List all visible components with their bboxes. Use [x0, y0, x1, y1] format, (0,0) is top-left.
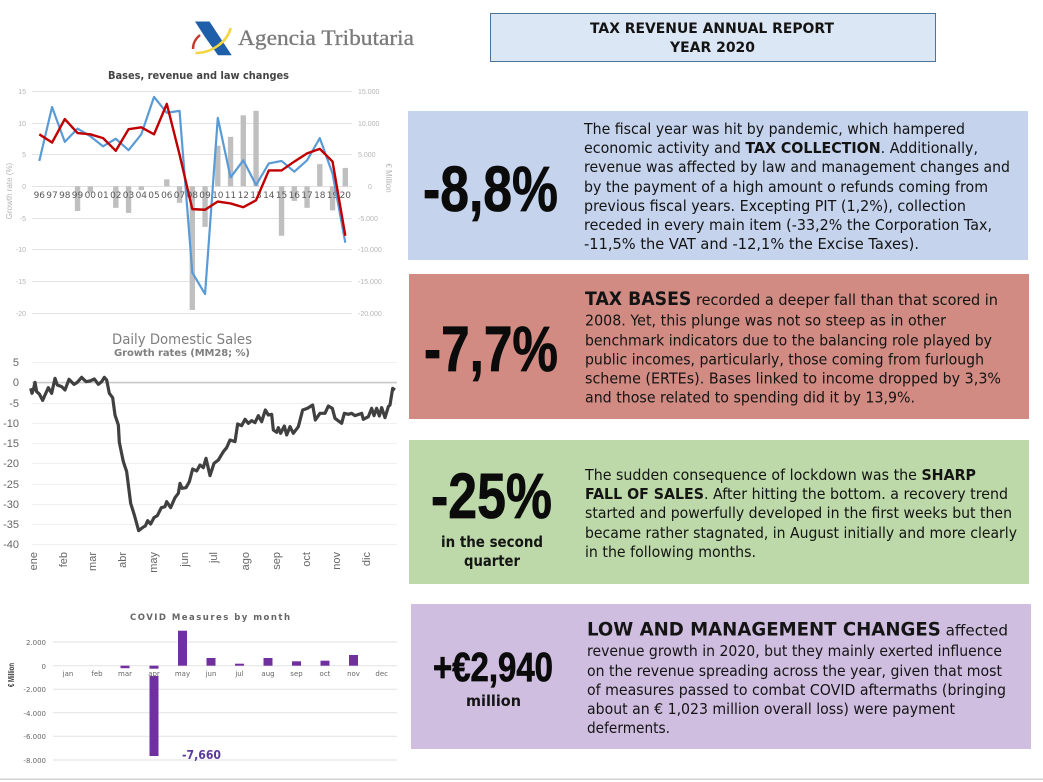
right axis labels: -15.000	[358, 279, 382, 286]
key figure caption	[441, 533, 543, 570]
month labels: may	[148, 552, 160, 573]
panel text: revenue was affected by law and management changes and	[584, 158, 1010, 176]
year labels: 11	[225, 191, 236, 201]
month labels	[28, 552, 373, 573]
year labels: 18	[314, 191, 326, 201]
month labels: dec	[375, 670, 388, 678]
year labels: 12	[238, 191, 249, 201]
panel text	[587, 620, 1008, 737]
y axis labels: -30	[3, 499, 19, 511]
panel: tax bases	[409, 274, 1029, 419]
month labels: sep	[271, 552, 283, 570]
logo: Agencia Tributaria	[193, 22, 414, 55]
panel text: The fiscal year was hit by pandemic, which hampered	[583, 120, 965, 138]
panel text: about an € 1,023 million overall loss) were payment	[587, 700, 955, 718]
left axis labels: -15	[16, 279, 26, 286]
axis title: million euro: € Million	[7, 663, 16, 687]
panel text: FALL OF SALES. After hitting the bottom. a recovery trend	[585, 485, 1008, 503]
month labels: mar	[118, 670, 132, 678]
panel text: on the revenue spreading across the year, given that most	[587, 662, 1002, 680]
panel text: of measures passed to combat COVID aftermaths (bringing	[587, 681, 1006, 699]
month labels: jan	[62, 670, 73, 678]
right axis labels: 5.000	[358, 152, 376, 159]
right axis labels: -10.000	[358, 247, 382, 254]
month labels: nov	[331, 552, 343, 570]
month labels: ene	[28, 552, 40, 570]
panel text: scheme (ERTEs). Bases linked to income dropped by 3,3%	[585, 370, 1001, 388]
month labels: ago	[240, 552, 252, 570]
left axis labels: -20	[16, 311, 26, 318]
y axis labels: 0	[13, 377, 19, 389]
y axis labels: -20	[3, 458, 19, 470]
chart title: Bases, revenue and law changes	[108, 69, 289, 82]
year labels: 17	[301, 191, 313, 201]
y axis labels: -5	[9, 398, 19, 410]
month labels: jul	[208, 552, 220, 564]
month labels: feb	[91, 670, 103, 678]
panel text: deferments.	[587, 719, 670, 737]
chart: bases, revenue and law changes	[5, 69, 393, 318]
panel text: The sudden consequence of lockdown was the SHARP	[584, 466, 976, 484]
left axis labels: 10	[18, 121, 26, 128]
month labels: abr	[117, 552, 129, 568]
y axis labels: -10	[3, 418, 19, 430]
chart: COVID measures by month	[7, 613, 397, 765]
year labels	[34, 191, 351, 201]
year labels: 20	[340, 191, 351, 201]
panel text: -11,5% the VAT and -12,1% the Excise Taxes).	[584, 235, 919, 253]
title box: TAX REVENUE ANNUAL REPORT	[590, 21, 834, 37]
left axis labels	[16, 89, 26, 318]
y axis labels	[3, 357, 19, 551]
month labels: sep	[290, 670, 303, 678]
year labels: 98	[59, 191, 71, 201]
chart title: COVID Measures by month	[130, 613, 290, 623]
right axis labels: -5.000	[358, 216, 378, 223]
left axis labels: 15	[18, 89, 26, 96]
panel text	[584, 466, 1017, 561]
panel text	[585, 289, 1001, 406]
left axis labels: -10	[16, 247, 26, 254]
axis title: growth rate: Growth rate (%)	[5, 162, 14, 219]
year labels: 16	[289, 191, 300, 201]
year labels: 09	[199, 191, 211, 201]
month labels: apr	[148, 670, 160, 678]
y axis labels: -6.000	[23, 733, 46, 741]
y axis labels: -8.000	[23, 757, 46, 765]
month labels: feb	[58, 552, 70, 567]
panel text: TAX BASES recorded a deeper fall than that scored in	[585, 289, 998, 310]
key figure: +€2,940	[433, 644, 553, 690]
y axis labels: -40	[3, 539, 19, 551]
panel text: receded in every main item (-33,2% the Corporation Tax,	[584, 216, 992, 234]
panel text: LOW AND MANAGEMENT CHANGES affected	[587, 620, 1008, 640]
year labels: 00	[85, 191, 96, 201]
title box: YEAR 2020	[669, 40, 755, 56]
panel text	[583, 120, 1010, 253]
logo: Agencia Tributaria: Agencia Tributaria	[238, 25, 414, 50]
right axis labels: -20.000	[358, 311, 382, 318]
panel text: benchmark indicators due to the balancing role played by	[585, 332, 992, 350]
y axis labels: -15	[3, 438, 19, 450]
right axis labels: 15.000	[358, 89, 380, 96]
month labels: mar	[87, 552, 99, 571]
left axis labels: 5	[22, 152, 26, 159]
key figure: -7,7%	[424, 313, 558, 385]
year labels: 13	[250, 191, 262, 201]
panel text: previous fiscal years. Excepting PIT (1,2%), collection	[584, 197, 966, 215]
year labels: 97	[46, 191, 58, 201]
right axis labels	[358, 89, 382, 318]
year labels: 05	[148, 191, 160, 201]
y axis labels: 0	[42, 663, 46, 671]
month labels: jun	[205, 670, 216, 678]
sales line	[31, 377, 395, 531]
panel text: revenue growth in 2020, but they mainly exerted influence	[587, 642, 1002, 660]
y axis labels: 5	[13, 357, 19, 369]
year labels: 04	[136, 191, 147, 201]
panel text: and those related to spending did it by 13,9%.	[585, 388, 915, 406]
key figure caption: in the second	[441, 533, 543, 551]
right axis labels: 0	[368, 184, 372, 191]
panel text: economic activity and TAX COLLECTION. Additionally,	[584, 139, 978, 157]
month labels: may	[175, 670, 190, 678]
blue line: revenue	[39, 97, 345, 294]
panel text: by the payment of a high amount o refunds coming from	[584, 178, 988, 196]
chart: daily domestic sales	[3, 332, 397, 573]
panel text: started and powerfully developed in the first weeks but then	[585, 504, 1012, 522]
month labels: jun	[179, 552, 191, 568]
grey bars: law changes	[75, 111, 348, 310]
month labels: nov	[347, 670, 360, 678]
panel: sales	[409, 440, 1029, 584]
year labels: 10	[212, 191, 224, 201]
right axis labels: 10.000	[358, 121, 380, 128]
panel: total revenue	[408, 111, 1028, 260]
y axis labels: -35	[3, 519, 19, 531]
year labels: 07	[174, 191, 185, 201]
left axis labels: -5	[20, 216, 26, 223]
y axis labels: -2.000	[23, 686, 46, 694]
month labels: dic	[361, 552, 373, 566]
month labels	[62, 670, 388, 678]
panel text: public incomes, particularly, those coming from furlough	[585, 350, 984, 368]
y axis labels: -4.000	[23, 710, 46, 718]
key figure caption: million	[466, 692, 521, 710]
panel text: in the following months.	[585, 543, 756, 561]
year labels: 06	[161, 191, 173, 201]
y axis labels: -25	[3, 479, 19, 491]
callout: april value: -7,660	[182, 747, 221, 762]
y axis labels: 2.000	[26, 639, 46, 647]
panel: law and management changes	[411, 604, 1031, 749]
title box	[490, 14, 936, 62]
month labels: oct	[301, 552, 313, 567]
y axis labels	[23, 639, 46, 765]
key figure: -8,8%	[423, 153, 558, 225]
axis title: million euro: € Million	[384, 163, 393, 193]
chart title: Daily Domestic Sales	[112, 332, 252, 348]
year labels: 15	[276, 191, 287, 201]
key figure: -25%	[431, 460, 552, 532]
year labels: 14	[263, 191, 275, 201]
year labels: 99	[72, 191, 83, 201]
red line: bases	[39, 104, 345, 236]
year labels: 19	[327, 191, 338, 201]
month labels: oct	[320, 670, 331, 678]
year labels: 03	[123, 191, 134, 201]
month labels: aug	[261, 670, 275, 678]
year labels: 01	[97, 191, 109, 201]
left axis labels: 0	[22, 184, 26, 191]
chart subtitle: Growth rates (MM28; %)	[114, 348, 250, 359]
panel text: 2008. Yet, this plunge was not so steep as in other	[585, 312, 947, 330]
year labels: 96	[34, 191, 45, 201]
key figure caption: quarter	[464, 552, 521, 570]
purple bars	[120, 631, 358, 756]
year labels: 08	[187, 191, 198, 201]
year labels: 02	[110, 191, 122, 201]
month labels: jul	[234, 670, 244, 678]
